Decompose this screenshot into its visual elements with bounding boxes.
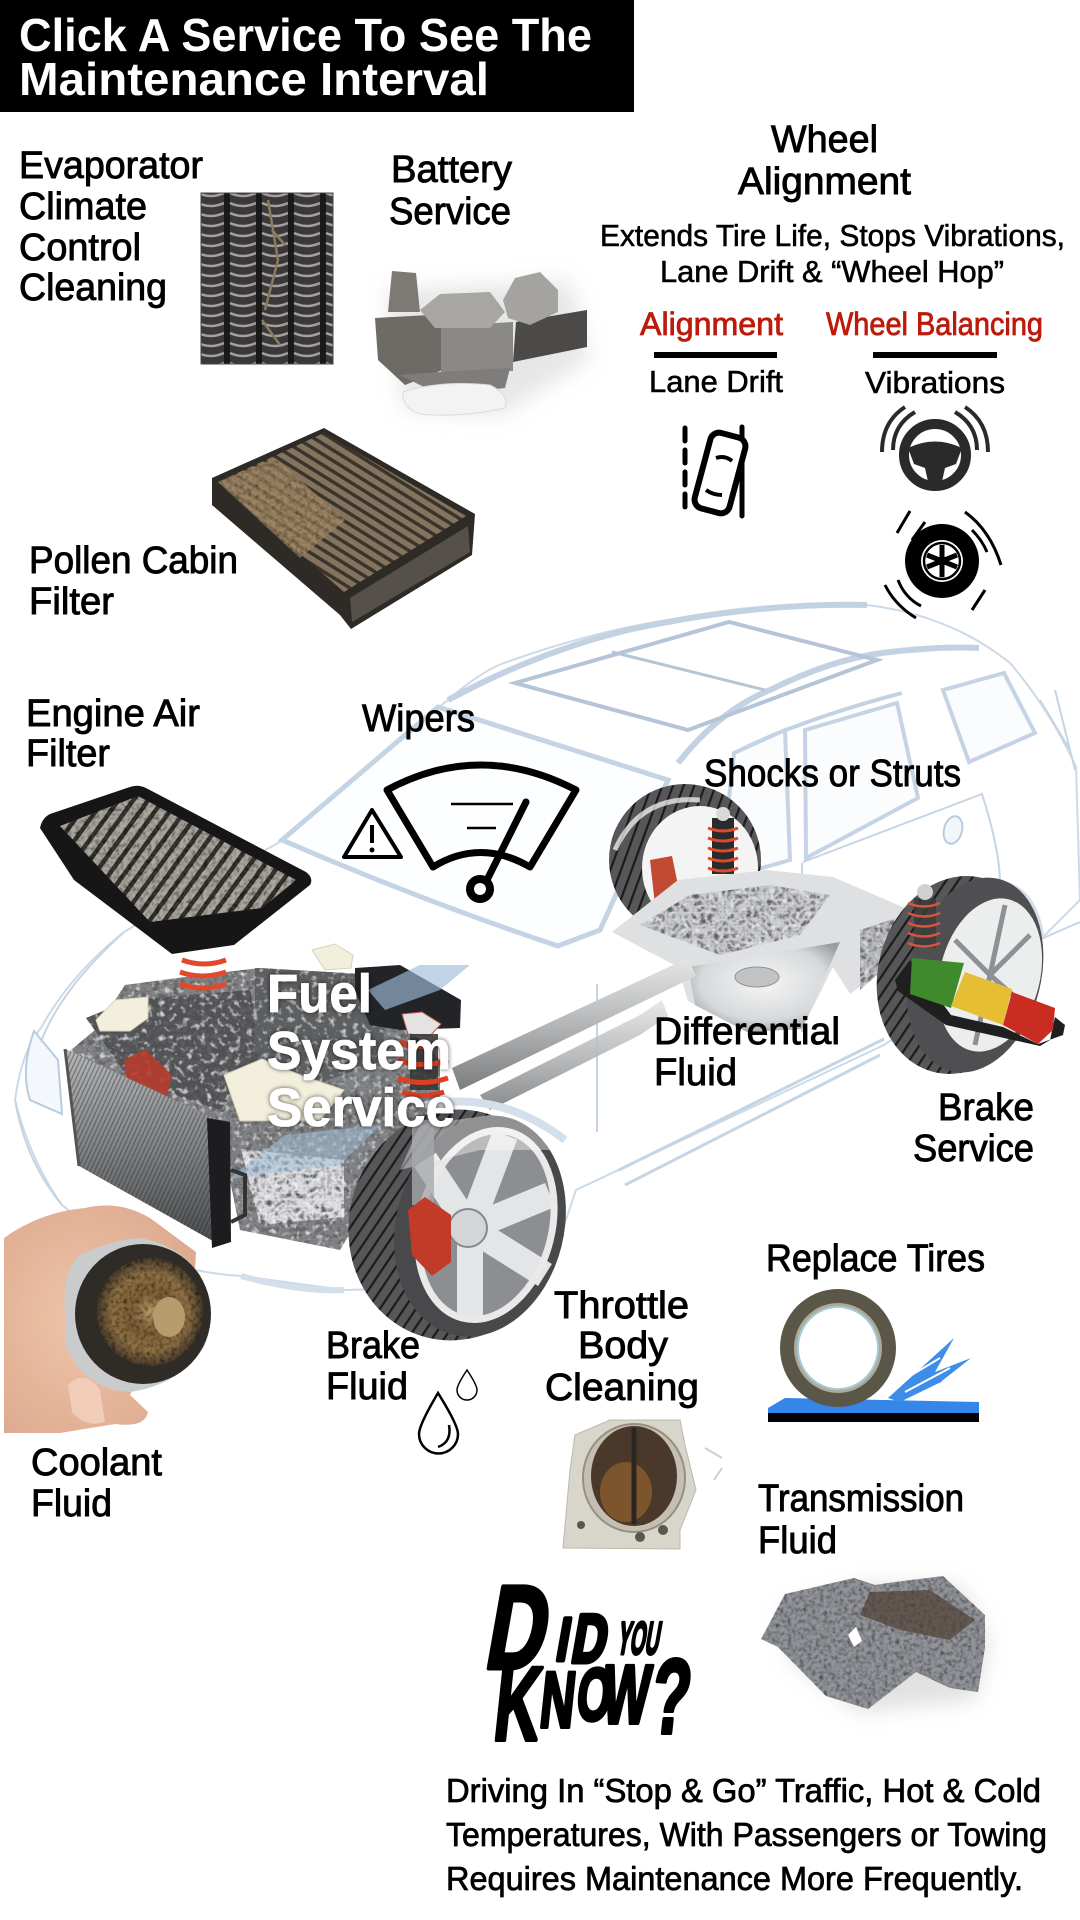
image: dirty evaporator core bbox=[201, 193, 333, 364]
image: corroded coolant cap in hand bbox=[4, 1206, 211, 1433]
label: pollen cabin filter: Filter bbox=[29, 581, 114, 623]
label: fuel system service: System bbox=[267, 1021, 451, 1081]
label: coolant fluid bbox=[31, 1442, 162, 1525]
column: alignment bbox=[640, 306, 783, 399]
image: burnt transmission debris bbox=[761, 1576, 990, 1712]
headlight glass bbox=[227, 1125, 380, 1180]
car body bbox=[15, 604, 1080, 1290]
label: evaporator climate control cleaning: Cleaning bbox=[19, 267, 167, 309]
label: brake service bbox=[913, 1087, 1034, 1170]
column: wheel balancing bbox=[826, 306, 1043, 400]
label: wipers: Wipers bbox=[362, 698, 475, 740]
rear axle and fuel tank bbox=[612, 870, 905, 1032]
lettering: did you know: K bbox=[489, 1646, 547, 1763]
title banner: Maintenance Interval bbox=[19, 53, 489, 105]
lettering: did you know: O bbox=[573, 1654, 616, 1736]
label: pollen cabin filter bbox=[29, 540, 238, 623]
far rear wheel bbox=[609, 784, 761, 936]
icon: vibrating steering wheel bbox=[882, 407, 988, 486]
label: battery service: Battery bbox=[391, 149, 512, 191]
label: brake fluid bbox=[326, 1325, 420, 1408]
icon: vibrating wheel bbox=[885, 511, 1001, 618]
label: brake fluid: Fluid bbox=[326, 1366, 408, 1408]
label: fuel system service: Service bbox=[267, 1078, 455, 1138]
label: pollen cabin filter: Pollen Cabin bbox=[29, 540, 238, 582]
label: battery service: Service bbox=[389, 191, 511, 233]
lettering: did you know: YOU bbox=[614, 1613, 665, 1664]
label: engine air filter bbox=[26, 693, 200, 775]
lettering: did you know: D bbox=[567, 1601, 614, 1677]
heading: wheel alignment bbox=[738, 119, 911, 203]
label: evaporator climate control cleaning: Evaporator bbox=[19, 145, 203, 187]
label: brake fluid: Brake bbox=[326, 1325, 420, 1367]
label: fuel system service: Fuel bbox=[267, 964, 372, 1024]
battery box bbox=[355, 965, 461, 1030]
text: wheel alignment benefits: Extends Tire Life, Stops Vibrations, bbox=[600, 218, 1065, 253]
rear spring bbox=[908, 884, 940, 948]
lettering: did you know: ? bbox=[646, 1638, 697, 1756]
icon: lane drift bbox=[685, 427, 747, 516]
icon: tire on wet road bbox=[768, 1289, 979, 1422]
blue glass detail bbox=[368, 965, 470, 1010]
column: wheel balancing: Vibrations bbox=[865, 365, 1005, 400]
lettering: did you know bbox=[479, 1561, 697, 1763]
label: transmission fluid: Fluid bbox=[758, 1520, 837, 1562]
lettering: did you know: N bbox=[536, 1656, 580, 1744]
image: dirty throttle body bbox=[563, 1420, 722, 1549]
text: driving conditions note: Driving In “Stop & Go” Traffic, Hot & Cold bbox=[446, 1772, 1041, 1809]
column: wheel balancing: Wheel Balancing bbox=[826, 306, 1043, 342]
near rear wheel bbox=[856, 859, 1063, 1091]
heading: wheel alignment: Alignment bbox=[738, 161, 911, 203]
label: throttle body cleaning bbox=[545, 1285, 699, 1409]
front strut shaft bbox=[412, 1120, 434, 1205]
label: differential fluid: Differential bbox=[654, 1011, 840, 1053]
lettering: did you know: I bbox=[552, 1607, 576, 1674]
body lines bbox=[15, 690, 1080, 1290]
door handle bbox=[941, 814, 965, 846]
text: driving conditions note: Requires Maintenance More Frequently. bbox=[446, 1860, 1023, 1897]
text: driving conditions note bbox=[446, 1772, 1047, 1897]
image: corroded battery terminal bbox=[375, 271, 590, 415]
fan red parts bbox=[124, 1049, 172, 1114]
text: wheel alignment benefits: Lane Drift & “Wheel Hop” bbox=[660, 254, 1004, 289]
label: battery service bbox=[389, 149, 512, 233]
label: differential fluid: Fluid bbox=[654, 1052, 737, 1094]
column: alignment: Lane Drift bbox=[649, 364, 783, 399]
label: evaporator climate control cleaning: Control bbox=[19, 227, 141, 269]
title banner bbox=[0, 0, 634, 112]
sunroof bbox=[515, 622, 877, 730]
label: coolant fluid: Fluid bbox=[31, 1483, 112, 1525]
engine block bbox=[65, 968, 440, 1250]
column: alignment: Alignment bbox=[640, 306, 783, 342]
icon: fluid drops bbox=[419, 1370, 477, 1454]
label: evaporator climate control cleaning bbox=[19, 145, 203, 309]
windscreen bbox=[282, 707, 668, 946]
text: driving conditions note: Temperatures, With Passengers or Towing bbox=[446, 1816, 1047, 1853]
front strut and spring bbox=[398, 1012, 448, 1096]
illustration: cutaway car bbox=[15, 604, 1080, 1363]
label: transmission fluid: Transmission bbox=[758, 1478, 964, 1520]
heading: wheel alignment: Wheel bbox=[771, 119, 878, 161]
label: replace tires: Replace Tires bbox=[766, 1238, 985, 1280]
label: throttle body cleaning: Throttle bbox=[554, 1285, 689, 1327]
icon: windshield wiper warning bbox=[344, 765, 576, 899]
washer reservoirs bbox=[96, 944, 353, 1121]
image: dirty pollen cabin filter bbox=[212, 428, 475, 629]
front wheel bbox=[324, 1087, 589, 1363]
roof rails and pillars bbox=[448, 605, 979, 763]
label: fuel system service bbox=[267, 964, 455, 1138]
label: brake service: Service bbox=[913, 1128, 1034, 1170]
label: engine air filter: Filter bbox=[26, 733, 110, 775]
front caliper bbox=[408, 1197, 451, 1276]
label: coolant fluid: Coolant bbox=[31, 1442, 162, 1484]
radiator bbox=[65, 1049, 245, 1248]
label: evaporator climate control cleaning: Climate bbox=[19, 186, 147, 228]
lettering: did you know: D bbox=[479, 1561, 561, 1693]
label: throttle body cleaning: Body bbox=[578, 1325, 668, 1367]
image: brake pad wear indicator bbox=[895, 958, 1065, 1046]
label: shocks or struts: Shocks or Struts bbox=[704, 753, 961, 795]
text: wheel alignment benefits bbox=[600, 218, 1065, 289]
label: engine air filter: Engine Air bbox=[26, 693, 200, 735]
lettering: did you know: W bbox=[598, 1648, 655, 1741]
label: brake service: Brake bbox=[938, 1087, 1034, 1129]
label: differential fluid bbox=[654, 1011, 840, 1094]
spring under air filter bbox=[180, 960, 226, 988]
exhaust pipes bbox=[452, 958, 696, 1110]
side windows bbox=[720, 673, 1035, 880]
title banner: Click A Service To See The bbox=[19, 9, 592, 61]
label: throttle body cleaning: Cleaning bbox=[545, 1367, 699, 1409]
label: transmission fluid bbox=[758, 1478, 964, 1562]
image: engine air filter bbox=[40, 786, 311, 954]
